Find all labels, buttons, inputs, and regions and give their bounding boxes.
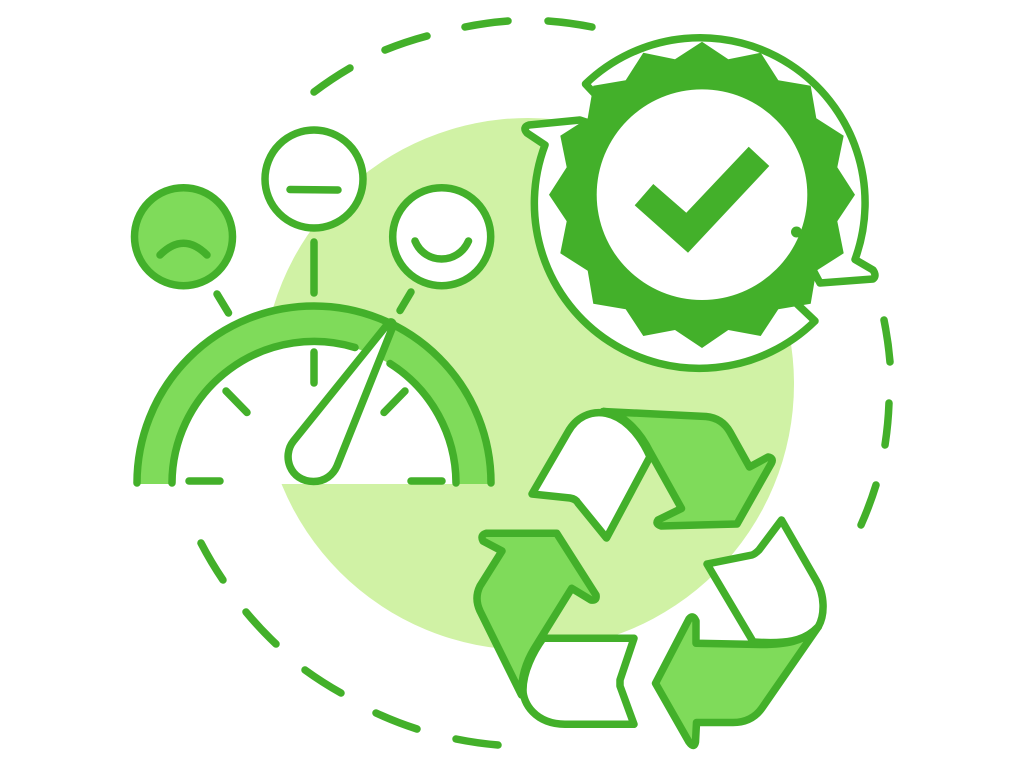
left arrow white fold: [523, 638, 634, 724]
speech arrows outline: [525, 37, 875, 368]
scalloped seal: [549, 42, 855, 348]
recycling symbol: [477, 412, 823, 746]
top arrow white fold: [532, 413, 650, 538]
dashed orbit ring: [201, 21, 890, 745]
seal centre: [597, 89, 807, 300]
gauge arcs: [137, 306, 491, 483]
neutral face: [265, 130, 363, 228]
gauge needle: [288, 322, 394, 482]
right arrow white fold: [707, 520, 823, 643]
speedometer gauge: [137, 306, 491, 484]
background circle: [262, 118, 794, 650]
gauge ticks: [189, 352, 442, 481]
gauge face: [172, 342, 456, 484]
left arrow green: [477, 533, 596, 695]
top arrow green: [603, 412, 772, 526]
happy face: [393, 188, 491, 286]
sad face: [134, 188, 232, 286]
quality badge: [525, 37, 875, 368]
face connectors: [217, 242, 411, 313]
gauge band: [137, 307, 491, 484]
right arrow green: [656, 617, 818, 746]
check mark: [635, 147, 769, 253]
arrow end cap: [791, 226, 802, 238]
